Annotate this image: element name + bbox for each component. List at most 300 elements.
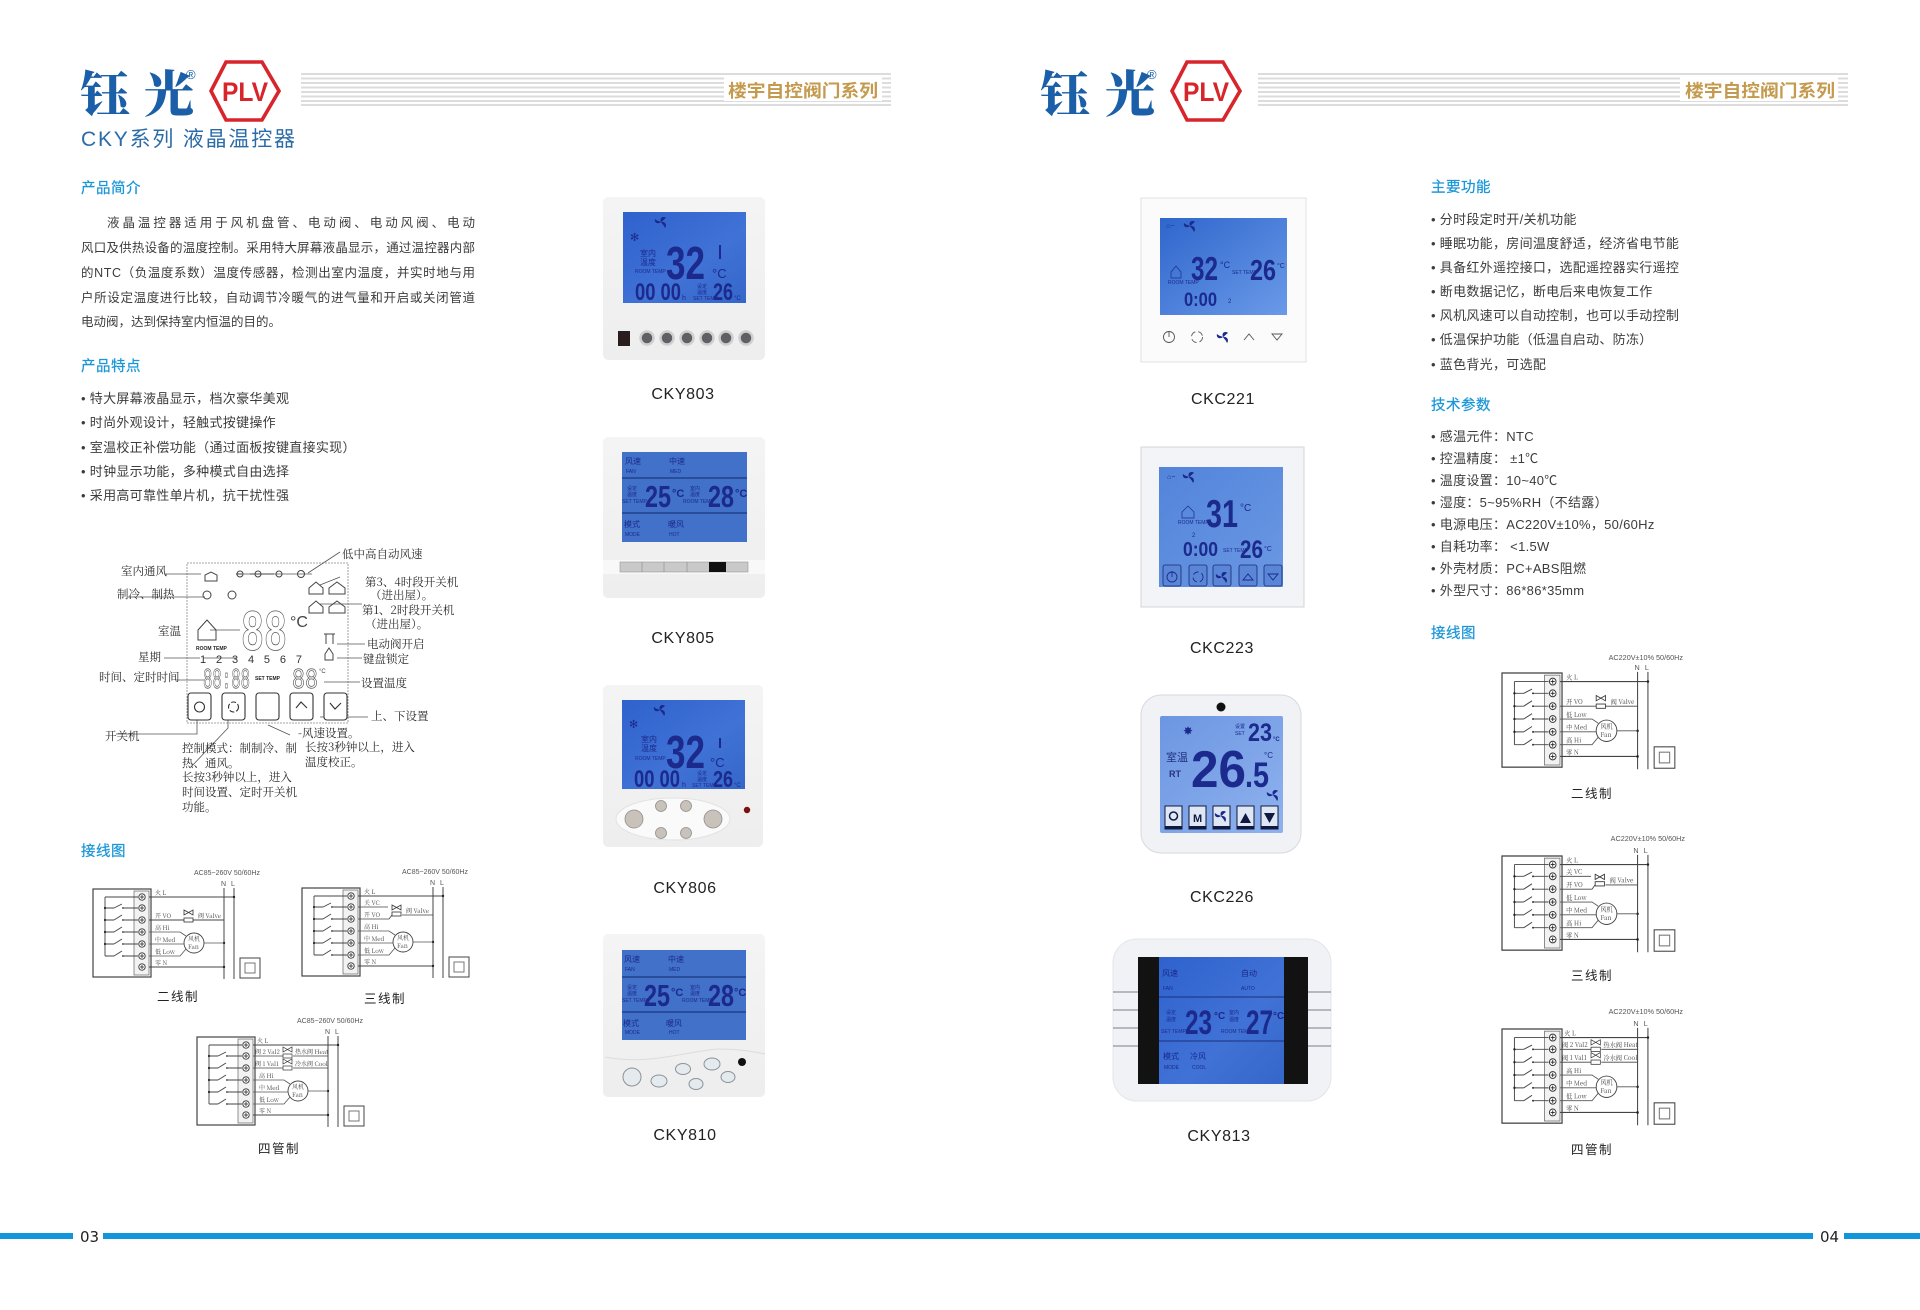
heading: 接线图 left: 接线图 xyxy=(81,843,126,860)
panel digits: 88 xyxy=(241,603,287,668)
wiring: 四管制 right xyxy=(1502,1007,1683,1157)
LCD panel callout diagram: 第1、2时段开关机 xyxy=(362,602,455,618)
product: CKC226: 23 xyxy=(1248,719,1272,747)
logo: 钰光: ® xyxy=(1147,67,1157,82)
product: CKY810: 风速 xyxy=(624,955,640,964)
wiring: 三线制 left xyxy=(302,869,469,1006)
wiring: 二线制 left: 零 N xyxy=(155,958,168,967)
product: CKY803: °C xyxy=(734,296,741,302)
wiring: 四管制 right: 四管制 xyxy=(1571,1142,1613,1157)
product: CKC223: SET TEMP xyxy=(1223,548,1248,554)
wiring: 三线制 right: 中 Med xyxy=(1566,906,1587,915)
wiring: 二线制 right: AC220V±10% 50/60Hz xyxy=(1609,653,1683,662)
wiring: 四管制 left: L xyxy=(335,1029,339,1036)
wiring: 四管制 left: 高 Hi xyxy=(259,1071,274,1080)
LCD panel callout diagram: 热、通风。 xyxy=(182,755,240,771)
function list: • 断电数据记忆，断电后来电恢复工作 xyxy=(1431,284,1653,299)
LCD panel callout diagram: 长按3秒钟以上，进入 xyxy=(182,769,292,785)
product: CKY806: ROOM TEMP xyxy=(635,756,666,762)
heading: 产品简介 xyxy=(81,180,141,197)
product: CKY803: SET TEMP xyxy=(693,296,718,302)
wiring: 二线制 left: 高 Hi xyxy=(155,923,170,932)
wiring: 四管制 left: Fan xyxy=(292,1090,303,1099)
wiring: 三线制 right xyxy=(1502,834,1685,983)
model label: CKC226 xyxy=(1190,889,1254,906)
paragraph: 的NTC（负温度系数）温度传感器，检测出室内温度，并实时地与用 xyxy=(81,265,475,280)
product: CKY805: 模式 xyxy=(624,519,640,529)
feature list: • 室温校正补偿功能（通过面板按键直接实现） xyxy=(81,440,356,455)
product: CKC226: 26 xyxy=(1191,741,1246,799)
wiring: 三线制 right: 阀 Valve xyxy=(1610,876,1634,885)
product: CKY806: 温度 xyxy=(697,776,707,783)
product: CKY813: COOL xyxy=(1192,1065,1206,1071)
product: CKC223: 31 xyxy=(1206,493,1238,536)
product: CKY813 xyxy=(1113,939,1331,1145)
wiring: 二线制 left xyxy=(93,870,260,1004)
product: CKY806: 00 00 xyxy=(634,766,680,793)
product: CKY806: h xyxy=(682,782,686,789)
logo: 钰光: ® xyxy=(186,67,196,82)
product: CKC226: RT xyxy=(1169,769,1181,779)
wiring: 三线制 right: 开 VO xyxy=(1566,880,1583,889)
product: CKY810: ROOM TEMP xyxy=(682,998,713,1004)
product: CKC221: ⌂~ xyxy=(1166,223,1174,230)
LCD panel callout diagram: 设置温度 xyxy=(361,675,407,691)
wiring: 四管制 left: 冷水阀 Cool xyxy=(295,1059,328,1068)
wiring: 二线制 right: L xyxy=(1645,663,1649,672)
model label: CKY810 xyxy=(653,1127,717,1144)
wiring: 四管制 right: 热水阀 Heat xyxy=(1603,1040,1638,1049)
wiring: 二线制 left: 阀 Valve xyxy=(198,911,222,920)
wiring: 三线制 left: 开 VO xyxy=(364,910,381,919)
panel icons xyxy=(198,570,345,660)
wiring: 四管制 right: Fan xyxy=(1600,1086,1611,1095)
wiring: 四管制 left: 风机 xyxy=(292,1082,304,1091)
panel digits xyxy=(203,603,318,697)
wiring: 三线制 right: 三线制 xyxy=(1571,969,1613,983)
product: CKY803: °C xyxy=(712,266,727,281)
product: CKY810: SET TEMP xyxy=(622,998,647,1004)
product: CKY813: 冷风 xyxy=(1190,1051,1206,1061)
wiring: 四管制 right: 中 Med xyxy=(1566,1079,1587,1088)
logo: PLV hexagon xyxy=(1172,62,1240,120)
wiring: 三线制 left: Fan xyxy=(397,941,408,950)
wiring: 二线制 right: 火 L xyxy=(1566,672,1578,681)
function list: • 分时段定时开/关机功能 xyxy=(1431,212,1577,227)
product: CKY806 xyxy=(603,685,763,897)
product: CKC226: SET xyxy=(1235,731,1245,737)
LCD panel callout diagram: 时间设置、定时开关机 xyxy=(182,784,297,800)
parameter list: • 外壳材质：PC+ABS阻燃 xyxy=(1431,561,1586,576)
wiring: 四管制 right: 高 Hi xyxy=(1566,1066,1581,1075)
product: CKY813: ROOM TEMP xyxy=(1221,1029,1252,1035)
product: CKY810: 28 xyxy=(708,978,734,1013)
section: 产品简介 xyxy=(81,180,475,329)
wiring: 三线制 left: 火 L xyxy=(364,887,376,896)
page number 03: 03 xyxy=(80,1228,99,1246)
product: CKY810: 中速 xyxy=(668,954,684,964)
product: CKC226: 室温 xyxy=(1166,750,1188,764)
product: CKY810: MODE xyxy=(625,1030,641,1036)
logo: 钰光 xyxy=(1040,55,1157,127)
product: CKY805: MED xyxy=(670,469,682,475)
product: CKY813: 风速 xyxy=(1162,969,1178,978)
wiring: 四管制 left: 热水阀 Heat xyxy=(295,1047,329,1056)
wiring: 三线制 left: 阀 Valve xyxy=(406,906,430,915)
header stripes and series label xyxy=(1258,74,1848,105)
LCD panel callout diagram: 功能。 xyxy=(182,799,216,815)
wiring: 四管制 right: AC220V±10% 50/60Hz xyxy=(1609,1007,1683,1016)
product: CKC226: °C xyxy=(1264,751,1273,760)
parameter list: • 湿度：5~95%RH（不结露） xyxy=(1431,495,1608,510)
wiring: 四管制 left: 四管制 xyxy=(258,1141,300,1156)
product: CKY813: 模式 xyxy=(1163,1051,1179,1061)
footer: page 04 number: 04 xyxy=(1820,1228,1839,1246)
wiring: 三线制 right: 火 L xyxy=(1566,855,1578,864)
wiring: 三线制 left: N xyxy=(430,880,435,887)
wiring: 四管制 left: N xyxy=(325,1029,330,1036)
product: CKY805: 28 xyxy=(708,479,734,514)
LCD panel callout diagram: 开关机 xyxy=(105,728,140,744)
function list: • 低温保护功能（低温自启动、防冻） xyxy=(1431,332,1653,347)
product: CKY803: 温度 xyxy=(640,257,656,267)
model label: CKY803 xyxy=(651,386,715,403)
product: CKC223: 2 xyxy=(1192,533,1196,539)
wiring: 二线制 left: 中 Med xyxy=(155,935,176,944)
product: CKC226: °C xyxy=(1273,737,1280,743)
product: CKY805: FAN xyxy=(626,469,636,475)
parameter list: • 温度设置：10~40℃ xyxy=(1431,473,1558,488)
product: CKY805: 室内 xyxy=(690,485,700,492)
function list xyxy=(1431,212,1679,372)
wiring: 三线制 right: Fan xyxy=(1600,913,1611,922)
product: CKY803: ROOM TEMP xyxy=(635,269,666,275)
wiring: 四管制 right: 风机 xyxy=(1600,1078,1613,1087)
parameter list: • 电源电压：AC220V±10%，50/60Hz xyxy=(1431,517,1655,532)
product: CKC221: °C xyxy=(1277,262,1285,270)
product: CKY806: °C xyxy=(734,783,741,789)
wiring: 三线制 right: 低 Low xyxy=(1566,893,1587,902)
wiring: 二线制 left: 低 Low xyxy=(155,947,175,956)
wiring: 二线制 right: 风机 xyxy=(1600,722,1613,731)
product: CKC223: 0:00 xyxy=(1183,539,1218,561)
product: CKY806: 设定 xyxy=(697,770,707,777)
product: CKY803: 室内 xyxy=(640,248,656,258)
product: CKY813: 温度 xyxy=(1229,1016,1239,1023)
LCD panel callout diagram: 上、下设置 xyxy=(371,708,429,724)
footer: page 03 xyxy=(0,1228,1920,1246)
product: CKY806: 室内 xyxy=(641,734,657,744)
product: CKY805 xyxy=(603,437,765,647)
wiring: 四管制 left: AC85~260V 50/60Hz xyxy=(297,1018,363,1025)
wiring: 三线制 right: N xyxy=(1633,846,1639,855)
product: CKY803: ✻ xyxy=(630,231,639,244)
LCD panel callout diagram: （进出屋）。 xyxy=(365,616,428,632)
product: CKY805: HOT xyxy=(669,532,680,538)
logo: 钰光: 光 xyxy=(144,55,194,127)
LCD panel callout diagram: 长按3秒钟以上，进入 xyxy=(305,739,415,755)
wiring: 二线制 left: 开 VO xyxy=(155,911,172,920)
product: CKY806: ✻ xyxy=(629,718,638,731)
panel digits: 88:88 xyxy=(203,664,250,697)
wiring: 三线制 left: 风机 xyxy=(397,933,409,942)
wiring: 三线制 right: 零 N xyxy=(1566,930,1579,939)
logo: PLV hexagon: PLV xyxy=(1183,77,1229,107)
product: CKC226 xyxy=(1141,695,1301,906)
logo: 钰光 xyxy=(80,55,196,127)
LCD panel callout diagram: 控制模式：制制冷、制 xyxy=(182,740,297,756)
parameter list: • 自耗功率： <1.5W xyxy=(1431,539,1550,554)
wiring: 四管制 left: 中 Med xyxy=(259,1083,280,1092)
wiring: 三线制 left: 关 VC xyxy=(364,898,380,907)
parameter list: • 感温元件：NTC xyxy=(1431,429,1534,444)
product: CKC221: °C xyxy=(1220,260,1231,270)
product: CKY813: AUTO xyxy=(1241,986,1255,992)
product: CKC221: 26 xyxy=(1250,255,1276,287)
product: CKY803: 温度 xyxy=(697,289,707,296)
model label: CKC221 xyxy=(1191,391,1255,408)
header stripes and series label: 楼宇自控阀门系列 xyxy=(1685,81,1835,101)
product: CKY813: 27 xyxy=(1246,1004,1273,1042)
wiring: 四管制 right: 零 N xyxy=(1566,1103,1579,1112)
product: CKY813: 温度 xyxy=(1166,1016,1176,1023)
product: CKY805: 设定 xyxy=(627,485,637,492)
feature list: • 采用高可靠性单片机，抗干扰性强 xyxy=(81,488,289,503)
model label: CKY813 xyxy=(1187,1128,1251,1145)
product: CKC223: ⌂~ xyxy=(1167,474,1175,481)
feature list xyxy=(81,391,356,503)
product: CKY813: 自动 xyxy=(1241,968,1257,978)
product: CKC223: °C xyxy=(1240,503,1251,514)
parameter list: • 外型尺寸：86*86*35mm xyxy=(1431,583,1584,598)
wiring: 四管制 right: 低 Low xyxy=(1566,1091,1587,1101)
product: CKY813: °C xyxy=(1214,1011,1225,1022)
wiring: 二线制 right: 零 N xyxy=(1566,747,1579,756)
header stripes and series label xyxy=(301,74,891,105)
product: CKC226: 设置 xyxy=(1235,723,1245,730)
LCD panel callout diagram: SET TEMP xyxy=(255,676,281,682)
product: CKY810: 温度 xyxy=(690,990,700,997)
function list: • 风机风速可以自动控制，也可以手动控制 xyxy=(1431,308,1679,323)
LCD panel callout diagram: 低中高自动风速 xyxy=(342,546,423,562)
wiring: 四管制 left: 阀 1 Val1 xyxy=(255,1059,279,1068)
product: CKC221: 2 xyxy=(1228,299,1232,305)
product: CKC221: 0:00 xyxy=(1184,290,1217,311)
wiring: 三线制 left: L xyxy=(440,880,444,887)
LCD panel callout diagram: °C xyxy=(319,669,326,675)
wiring: 二线制 right: 高 Hi xyxy=(1566,735,1581,745)
LCD panel callout diagram: 室温 xyxy=(158,623,181,639)
wiring: 四管制 left: 零 N xyxy=(259,1106,272,1115)
product: CKY805: ROOM TEMP xyxy=(683,499,714,505)
heading: 主要功能 xyxy=(1431,179,1491,196)
wiring: 三线制 left: 零 N xyxy=(364,957,377,966)
LCD panel callout diagram: 室内通风 xyxy=(121,563,167,579)
product: CKY805: SET TEMP xyxy=(622,499,647,505)
wiring: 四管制 right: L xyxy=(1644,1019,1648,1028)
header: right page xyxy=(1040,55,1848,127)
feature list: • 特大屏幕液晶显示，档次豪华美观 xyxy=(81,391,289,406)
product: CKC223: °C xyxy=(1264,545,1272,553)
product: CKY810: 设定 xyxy=(627,984,637,991)
product: CKY805: °C xyxy=(735,488,747,500)
section: 产品特点 xyxy=(81,358,356,503)
product: CKY813: 室内 xyxy=(1229,1009,1239,1016)
product: CKY803: h xyxy=(682,295,686,302)
product: CKC226: ✸ xyxy=(1183,724,1193,738)
wiring: 三线制 left: 高 Hi xyxy=(364,922,379,931)
paragraph xyxy=(81,215,475,329)
logo: 钰光: 光 xyxy=(1105,55,1155,127)
wiring: 二线制 left: 火 L xyxy=(155,888,167,897)
LCD panel callout diagram: 1 2 3 4 5 6 7 xyxy=(200,654,302,666)
wiring: 四管制 right: N xyxy=(1633,1019,1639,1028)
section: 主要功能 xyxy=(1431,179,1679,372)
product: CKY805: 25 xyxy=(645,479,671,514)
LCD panel callout diagram: 电动阀开启 xyxy=(367,636,424,652)
wiring: 四管制 left: 阀 2 Val2 xyxy=(255,1047,281,1056)
wiring: 四管制 right: 冷水阀 Cool xyxy=(1603,1053,1637,1062)
product: CKY810: °C xyxy=(734,987,746,999)
wiring: 二线制 left: Fan xyxy=(188,942,199,951)
wiring: 三线制 right: AC220V±10% 50/60Hz xyxy=(1611,834,1685,843)
LCD panel callout diagram: 制冷、制热 xyxy=(117,586,175,602)
wiring: 三线制 right: 风机 xyxy=(1600,905,1613,914)
product: CKC226: .5 xyxy=(1245,756,1269,795)
wiring: 三线制 left: 中 Med xyxy=(364,934,385,943)
logo: PLV hexagon xyxy=(211,62,279,120)
wiring: 二线制 right: 低 Low xyxy=(1566,710,1587,719)
product: CKC221: SET TEMP xyxy=(1232,270,1257,276)
paragraph: 电动阀，达到保持室内恒温的目的。 xyxy=(81,314,281,329)
product: CKY810: 温度 xyxy=(627,990,637,997)
logo: 钰光: 钰 xyxy=(80,55,132,127)
paragraph: 户所设定温度进行比较，自动调节冷暖气的进气量和开启或关闭管道 xyxy=(81,290,475,305)
wiring: 三线制 right: 高 Hi xyxy=(1566,918,1581,928)
product: CKY805: 中速 xyxy=(669,456,685,466)
wiring: 二线制 right: 开 VO xyxy=(1566,697,1583,706)
product: CKY813: FAN xyxy=(1163,986,1173,992)
product: CKY803: 设定 xyxy=(697,283,707,290)
logo: PLV hexagon: PLV xyxy=(222,77,268,107)
wiring: 二线制 left: AC85~260V 50/60Hz xyxy=(194,870,260,877)
parameter list xyxy=(1431,429,1655,598)
product: CKY813: 设定 xyxy=(1166,1009,1176,1016)
product: CKC221 xyxy=(1141,198,1306,408)
product: CKY806: 温度 xyxy=(641,743,657,753)
LCD panel callout diagram: （进出屋）。 xyxy=(370,587,433,603)
function list: • 具备红外遥控接口，选配遥控器实行遥控 xyxy=(1431,260,1679,275)
product: CKY810: 室内 xyxy=(690,984,700,991)
panel buttons xyxy=(188,693,347,720)
model label: CKY806 xyxy=(653,880,717,897)
product: CKC221: ROOM TEMP xyxy=(1168,280,1199,286)
product: CKY813: SET TEMP xyxy=(1161,1029,1186,1035)
title: CKY系列 液晶温控器 xyxy=(81,128,295,151)
paragraph: 风口及供热设备的温度控制。采用特大屏幕液晶显示，通过温控器内部 xyxy=(81,240,475,255)
wiring: 二线制 right: N xyxy=(1634,663,1640,672)
wiring: 三线制 right: 关 VC xyxy=(1566,867,1583,876)
product: CKY813: MODE xyxy=(1164,1065,1180,1071)
product: CKY813: 23 xyxy=(1185,1004,1212,1042)
heading: 技术参数 xyxy=(1431,397,1491,414)
product: CKC223 xyxy=(1141,447,1304,657)
wiring: 二线制 right xyxy=(1502,653,1683,801)
product: CKY810: HOT xyxy=(669,1030,680,1036)
wiring: 二线制 right: 阀 Valve xyxy=(1611,697,1635,706)
wiring: 二线制 right: 中 Med xyxy=(1566,723,1587,732)
product: CKC226: M xyxy=(1193,813,1202,825)
LCD panel callout diagram: 时间、定时时间 xyxy=(99,669,180,685)
product: CKY810: FAN xyxy=(625,967,635,973)
product: CKY806: SET TEMP xyxy=(692,783,717,789)
wiring: 三线制 left: 三线制 xyxy=(364,992,406,1006)
product: CKY803: 00 00 xyxy=(635,279,681,306)
section: 技术参数 xyxy=(1431,397,1655,598)
LCD panel callout diagram: 温度校正。 xyxy=(305,754,362,770)
wiring: 三线制 right: L xyxy=(1644,846,1648,855)
wiring: 四管制 right: 阀 1 Val1 xyxy=(1562,1053,1587,1062)
wiring: 四管制 right: 阀 2 Val2 xyxy=(1562,1040,1588,1049)
LCD panel callout diagram: -风速设置。 xyxy=(298,725,359,741)
product: CKY805: 温度 xyxy=(690,491,700,498)
header stripes and series label: 楼宇自控阀门系列 xyxy=(728,81,878,101)
logo: 钰光: 钰 xyxy=(1040,55,1092,127)
wiring: 四管制 left xyxy=(197,1018,364,1156)
LCD panel callout diagram: ROOM TEMP xyxy=(196,646,227,652)
LCD panel callout diagram: 第3、4时段开关机 xyxy=(365,574,459,590)
LCD panel callout diagram xyxy=(99,546,459,815)
LCD panel callout diagram: 键盘锁定 xyxy=(363,651,409,667)
product: CKY803: 26 xyxy=(713,279,733,306)
product: CKY805: °C xyxy=(672,488,684,500)
feature list: • 时钟显示功能，多种模式自由选择 xyxy=(81,464,289,479)
LCD panel callout diagram: 星期 xyxy=(138,649,161,665)
product: CKY806: °C xyxy=(710,755,725,770)
product: CKY810: °C xyxy=(671,987,683,999)
product: CKC221: 32 xyxy=(1191,250,1218,287)
product: CKY810: MED xyxy=(669,967,680,973)
wiring: 三线制 left: AC85~260V 50/60Hz xyxy=(402,869,468,876)
panel digits: 88 xyxy=(292,664,318,697)
model label: CKC223 xyxy=(1190,640,1254,657)
product: CKY805: 风速 xyxy=(625,457,641,466)
product: CKY805: 暖风 xyxy=(668,520,684,529)
product: CKY805: MODE xyxy=(625,532,641,538)
product: CKY806: 26 xyxy=(713,766,733,792)
model label: CKY805 xyxy=(651,630,715,647)
product: CKC223: 26 xyxy=(1240,536,1263,564)
product: CKY810 xyxy=(603,934,765,1144)
feature list: • 时尚外观设计，轻触式按键操作 xyxy=(81,415,276,430)
function list: • 蓝色背光，可选配 xyxy=(1431,357,1546,372)
product: CKY806: 32 xyxy=(666,726,705,778)
product: CKC223: ROOM TEMP xyxy=(1178,520,1209,526)
wiring: 二线制 left: 风机 xyxy=(188,934,200,943)
product: CKY805: 温度 xyxy=(627,491,637,498)
product: CKY810: 25 xyxy=(644,978,670,1013)
product: CKY810: 模式 xyxy=(623,1018,639,1028)
product: CKY803 xyxy=(603,197,765,403)
parameter list: • 控温精度： ±1℃ xyxy=(1431,451,1538,466)
LCD panel callout diagram: °C xyxy=(290,614,308,631)
wiring: 二线制 left: N xyxy=(221,881,226,888)
wiring: 二线制 left: 二线制 xyxy=(157,990,199,1004)
product: CKY803: 32 xyxy=(666,237,705,289)
wiring: 四管制 left: 火 L xyxy=(257,1036,269,1045)
heading: 接线图 right: 接线图 xyxy=(1431,625,1476,642)
wiring: 四管制 right: 火 L xyxy=(1564,1028,1576,1037)
